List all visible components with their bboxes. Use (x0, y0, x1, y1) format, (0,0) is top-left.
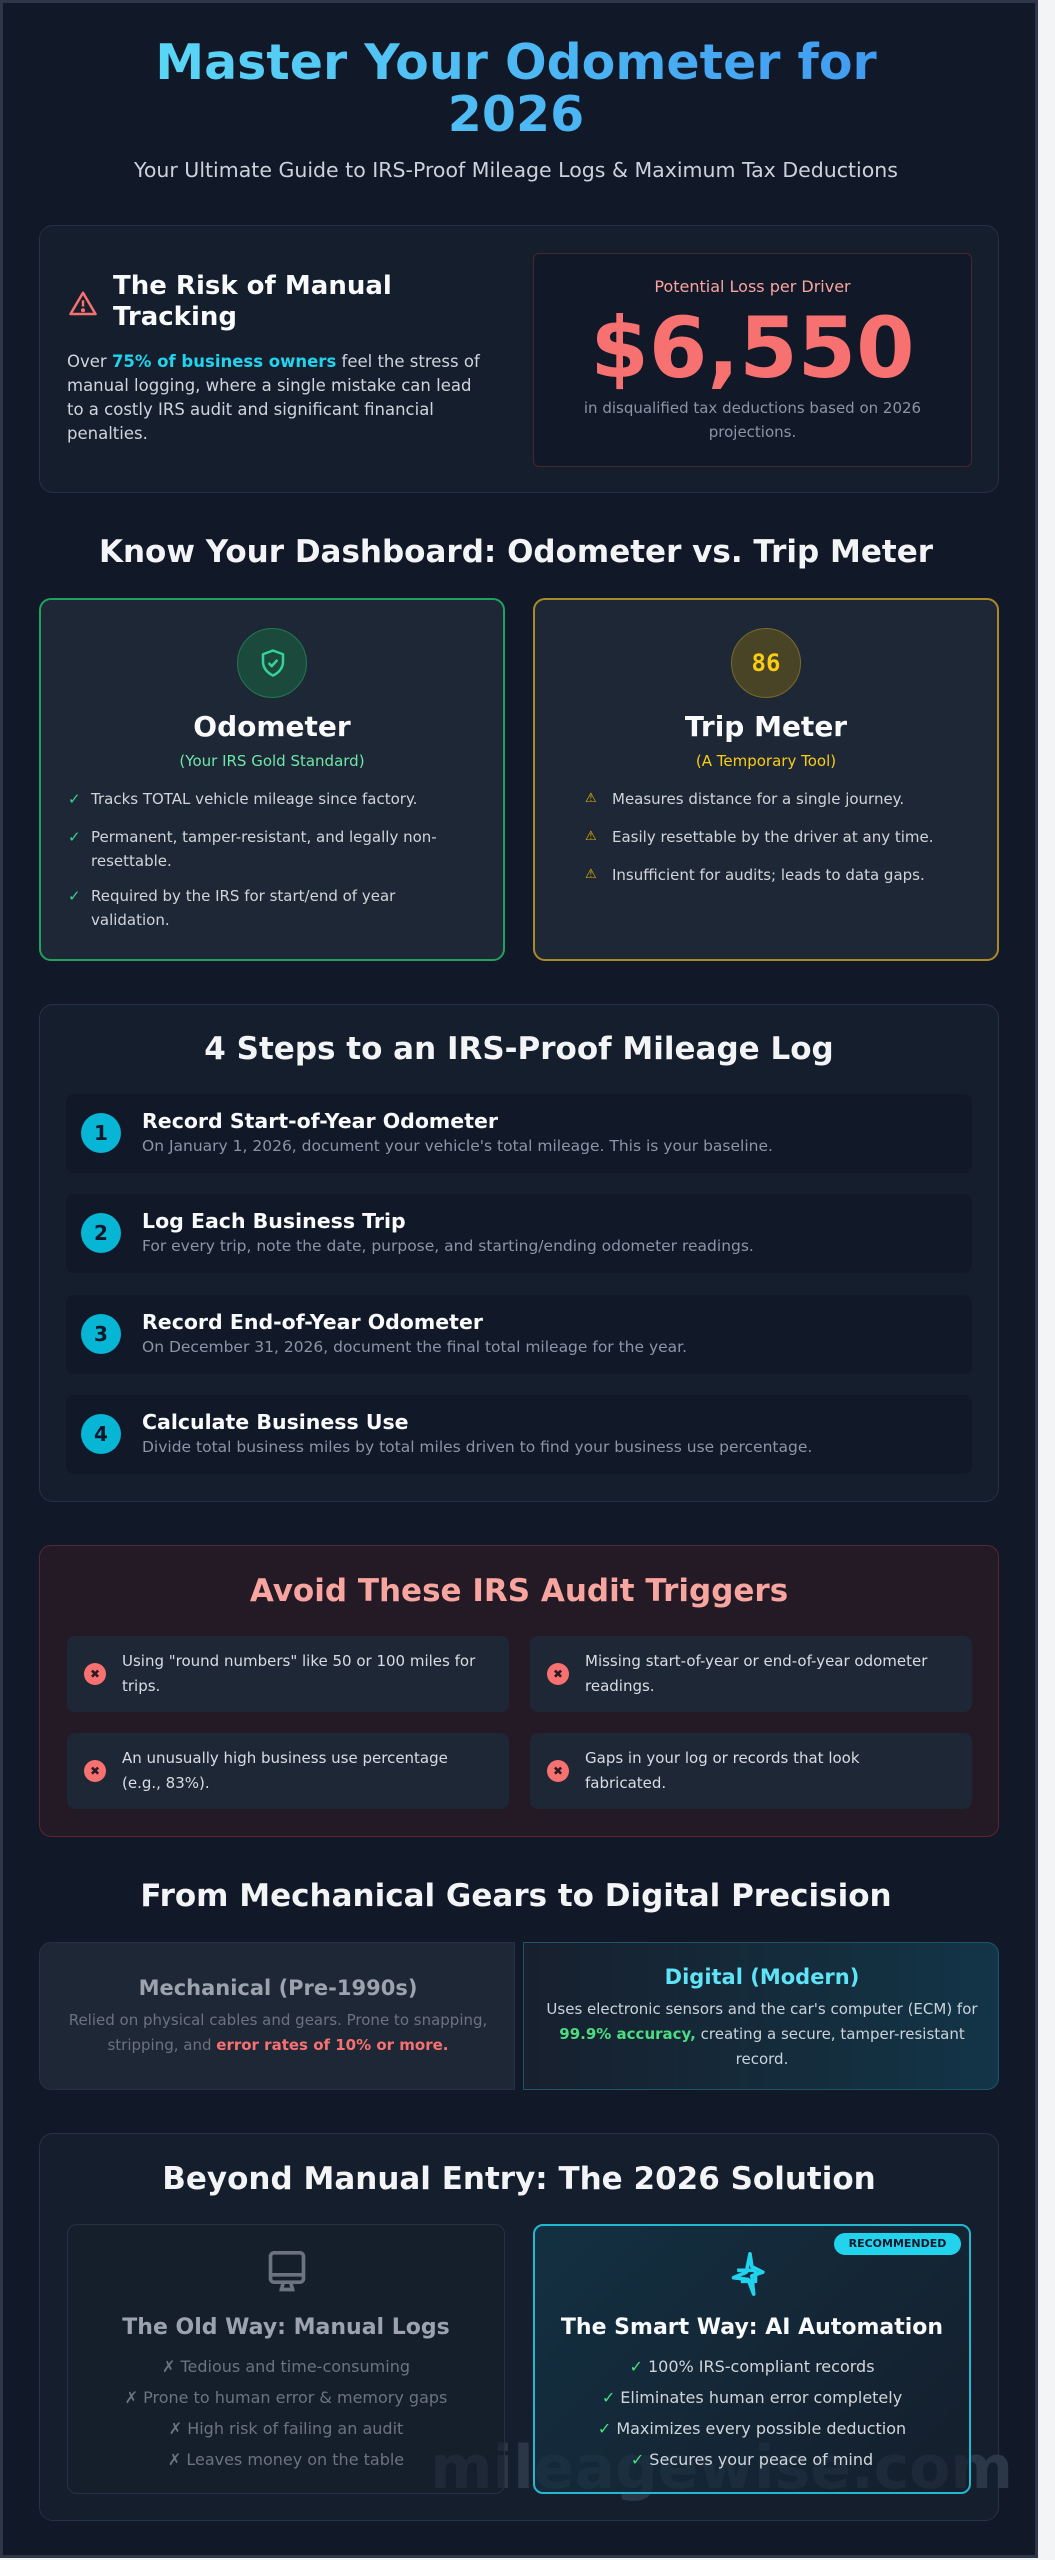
panel: mechanical (39, 1942, 515, 2090)
list: odometer benefits: Permanent, tamper-resistant, and legally non-resettable. (91, 828, 437, 870)
panel: mechanical: Relied on physical cables and gears. Prone to snapping, stripping, and error rates of 10% or more. (69, 2011, 487, 2054)
icon: shield (237, 628, 307, 698)
title: 2026 (448, 86, 584, 143)
heading: risk (113, 271, 392, 332)
list: trip meter drawbacks: ⚠ (585, 791, 597, 806)
heading: odometer: Odometer (193, 710, 351, 743)
panel: risk of manual tracking (39, 225, 999, 493)
step 1: On January 1, 2026, document your vehicle's total mileage. This is your baseline. (142, 1137, 773, 1155)
icon: monitor (268, 2251, 306, 2292)
panel: digital: Uses electronic sensors and the car's computer (ECM) for 99.9% accuracy, creating a secure, tamper-resistant record. (546, 2000, 978, 2068)
heading: risk: The Risk of Manual (113, 271, 392, 301)
card: old way: The Old Way: Manual Logs (122, 2315, 450, 2340)
trigger 4: ✖ (553, 1764, 563, 1778)
card: smart way: The Smart Way: AI Automation (561, 2315, 943, 2340)
card: old way (67, 2224, 505, 2494)
panel: digital: Digital (Modern) (665, 1965, 859, 1989)
card: smart way: ✓ 100% IRS-compliant records (629, 2357, 875, 2376)
icon: digits (731, 628, 801, 698)
panel: 2026 solution (39, 2133, 999, 2521)
trigger 2: Missing start-of-year or end-of-year odometer readings. (585, 1652, 927, 1695)
subtitle: odometer: (Your IRS Gold Standard) (179, 752, 365, 770)
list: trip meter drawbacks: ⚠ (585, 867, 597, 882)
heading: trip meter: Trip Meter (685, 710, 847, 743)
list: trip meter drawbacks (585, 790, 934, 884)
card: old way: ✗ Prone to human error & memory gaps (125, 2388, 447, 2407)
panel: mechanical: Mechanical (Pre-1990s) (139, 1976, 417, 2000)
card: smart way: ✓ Eliminates human error completely (602, 2388, 902, 2407)
card: smart way: ✓ Maximizes every possible deduction (598, 2419, 906, 2438)
icon: warning (69, 292, 97, 316)
step 2 (66, 1194, 972, 1273)
step 4 (66, 1395, 972, 1474)
step 3: Record End-of-Year Odometer (142, 1310, 483, 1334)
card: old way: ✗ Tedious and time-consuming (162, 2357, 410, 2376)
trigger 4: Gaps in your log or records that look fabricated. (585, 1749, 860, 1792)
step 2: 2 (94, 1221, 108, 1245)
icon: ai spark (732, 2252, 765, 2296)
list: trip meter drawbacks: ⚠ (585, 829, 597, 844)
panel: 4 steps (39, 1004, 999, 1502)
card: old way: ✗ High risk of failing an audit (169, 2419, 403, 2438)
badge: recommended: RECOMMENDED (849, 2237, 946, 2250)
list: odometer benefits: Required by the IRS for start/end of year validation. (91, 887, 395, 929)
step 1: 1 (94, 1121, 108, 1145)
trigger 3 (67, 1733, 509, 1809)
panel: odometer (39, 598, 505, 961)
trigger 4 (530, 1733, 972, 1809)
badge: recommended (834, 2233, 961, 2255)
step 3: 3 (94, 1322, 108, 1346)
panel: audit triggers (39, 1545, 999, 1837)
watermark: mileagewise.com (430, 2433, 1013, 2503)
trigger 3: ✖ (90, 1764, 100, 1778)
list: odometer benefits (68, 790, 437, 929)
callout: potential loss: Potential Loss per Driver (654, 277, 851, 296)
heading: audit triggers: Avoid These IRS Audit Triggers (250, 1573, 788, 1609)
card: smart way: ✓ Secures your peace of mind (631, 2450, 873, 2469)
heading: solution: Beyond Manual Entry: The 2026 Solution (162, 2161, 876, 2197)
subtitle: Your Ultimate Guide to IRS-Proof Mileage Logs & Maximum Tax Deductions (134, 158, 898, 182)
heading: steps: 4 Steps to an IRS-Proof Mileage Log (204, 1031, 834, 1067)
callout: potential loss (533, 253, 972, 467)
heading: mechanical to digital: From Mechanical Gears to Digital Precision (140, 1878, 892, 1914)
list: trip meter drawbacks: Insufficient for audits; leads to data gaps. (612, 866, 925, 884)
step 4: Divide total business miles by total miles driven to find your business use percentage. (142, 1438, 812, 1456)
step 4: Calculate Business Use (142, 1410, 409, 1434)
step 4: 4 (94, 1422, 108, 1446)
step 3: On December 31, 2026, document the final total mileage for the year. (142, 1338, 687, 1356)
step 2: For every trip, note the date, purpose, and starting/ending odometer readings. (142, 1237, 754, 1255)
trigger 1: Using "round numbers" like 50 or 100 miles for trips. (122, 1652, 475, 1695)
step 3 (66, 1295, 972, 1374)
step 2: Log Each Business Trip (142, 1209, 406, 1233)
title: Master Your Odometer for (155, 34, 877, 91)
step 1: Record Start-of-Year Odometer (142, 1109, 498, 1133)
panel: digital (523, 1942, 999, 2090)
trigger 1: ✖ (90, 1667, 100, 1681)
trigger 1 (67, 1636, 509, 1712)
list: trip meter drawbacks: Easily resettable by the driver at any time. (612, 828, 934, 846)
list: odometer benefits: ✓ (68, 790, 81, 808)
trigger 3: An unusually high business use percentage (e.g., 83%). (122, 1749, 448, 1792)
card: old way: ✗ Leaves money on the table (168, 2450, 404, 2469)
subtitle: trip meter: (A Temporary Tool) (696, 752, 836, 770)
list: odometer benefits: ✓ (68, 828, 81, 846)
list: odometer benefits: ✓ (68, 887, 81, 905)
trigger 2: ✖ (553, 1667, 563, 1681)
heading: dashboard: Know Your Dashboard: Odometer vs. Trip Meter (99, 534, 933, 570)
card: smart way (533, 2224, 971, 2494)
callout: potential loss: in disqualified tax deductions based on 2026 projections. (584, 399, 921, 441)
panel: trip meter (533, 598, 999, 961)
callout: potential loss: $6,550 (590, 299, 915, 397)
list: odometer benefits: Tracks TOTAL vehicle mileage since factory. (91, 790, 417, 808)
icon: digits: 86 (752, 649, 780, 677)
list: trip meter drawbacks: Measures distance for a single journey. (612, 790, 904, 808)
text: risk body: Over 75% of business owners feel the stress of manual logging, where a single mistake can lead to a costly IRS audit and significant financial penalties. (67, 352, 480, 443)
heading: risk: Tracking (113, 302, 237, 332)
trigger 2 (530, 1636, 972, 1712)
title (0, 37, 1032, 141)
step 1 (66, 1094, 972, 1173)
